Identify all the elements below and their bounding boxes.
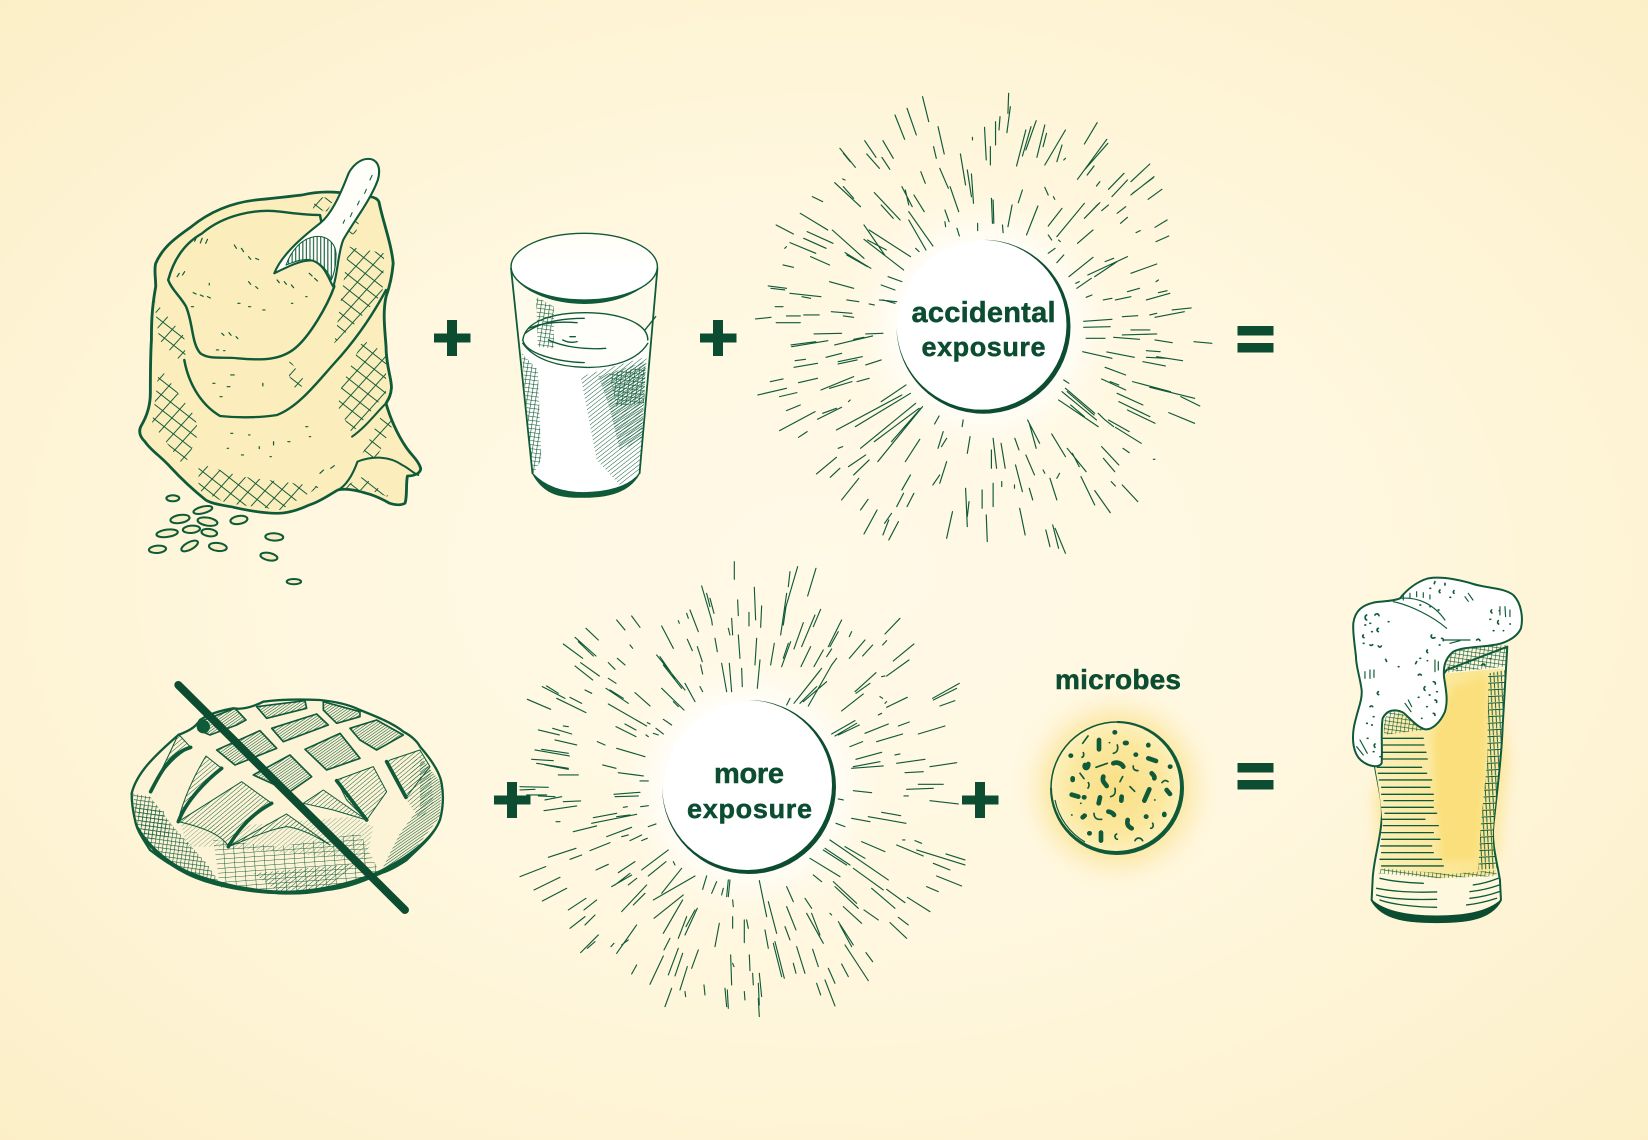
label: more exposure: more [714, 758, 784, 790]
label: accidental exposure [912, 297, 1056, 362]
icon: glass of water [511, 233, 657, 497]
center disc [662, 700, 836, 874]
label: accidental exposure: exposure [922, 332, 1046, 362]
icon: sack of grain with scoop [140, 159, 421, 584]
microbes [1071, 732, 1170, 841]
label: more exposure: exposure [687, 794, 812, 824]
operator: plus [434, 320, 470, 356]
foam [1353, 578, 1522, 766]
operator: plus [494, 782, 530, 818]
burst: more exposure [520, 562, 965, 1017]
slash [178, 685, 405, 910]
label: accidental exposure: accidental [912, 297, 1056, 329]
rays [520, 562, 965, 1017]
center disc [896, 240, 1070, 414]
operator: equals [1238, 763, 1274, 790]
icon: beer glass with foam [1353, 578, 1522, 923]
operator: equals [1238, 326, 1274, 352]
icon: spilled grains [149, 495, 301, 584]
rays [755, 93, 1212, 553]
burst: accidental exposure [755, 93, 1212, 553]
operator: plus [962, 782, 998, 818]
label: more exposure [687, 758, 812, 824]
heading: microbes: microbes [1055, 664, 1181, 695]
scored squares [198, 701, 403, 792]
icon: microbe dish [1041, 712, 1193, 864]
icon: crossed out bread loaf [132, 685, 443, 910]
crust hatching [133, 757, 442, 894]
operator: plus [700, 320, 736, 356]
